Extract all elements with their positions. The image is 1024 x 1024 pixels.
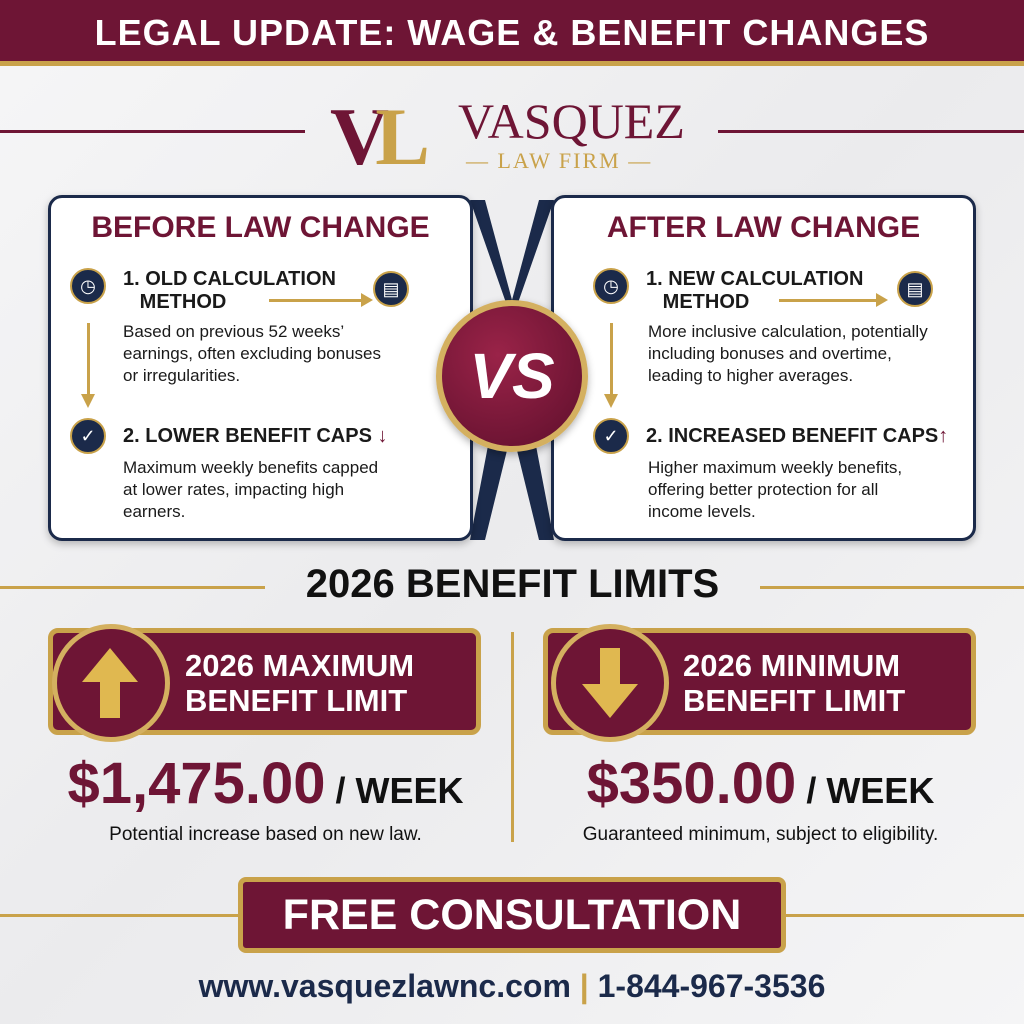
panel: after: offering better protection for all: [648, 480, 878, 499]
panel: after: Higher maximum weekly benefits,: [648, 458, 902, 477]
title after: AFTER LAW CHANGE: [607, 211, 920, 244]
icon clock: ◷: [80, 276, 96, 296]
min value: $350.00 / WEEK: [587, 751, 934, 816]
text: 2026 BENEFIT LIMITS: [306, 562, 719, 606]
title before: BEFORE LAW CHANGE: [91, 211, 430, 244]
header bar: LEGAL UPDATE: WAGE & BENEFIT CHANGES: [95, 12, 929, 53]
panel: after: income levels.: [648, 502, 756, 521]
section heading: [0, 586, 265, 589]
logo: [330, 91, 685, 182]
min box: [543, 624, 976, 845]
panel: after: More inclusive calculation, potentially: [648, 322, 928, 341]
panel: before: 2. LOWER BENEFIT CAPS ↓: [123, 425, 387, 447]
max box: Potential increase based on new law.: [109, 824, 422, 845]
panel: after: 1. NEW CALCULATION: [646, 268, 863, 290]
icon document: [373, 271, 409, 307]
max box: [48, 624, 481, 845]
panel: before: 1. OLD CALCULATION: [123, 268, 336, 290]
panel: before: Based on previous 52 weeks’: [123, 322, 344, 341]
min box: Guaranteed minimum, subject to eligibility.: [583, 824, 938, 845]
up arrow: [82, 648, 138, 718]
panel: after: 2. INCREASED BENEFIT CAPS↑: [646, 425, 948, 447]
panel: before: Maximum weekly benefits capped: [123, 458, 378, 477]
min box: 2026 MINIMUM: [683, 648, 900, 683]
icon document: ▤: [906, 279, 924, 299]
logo: — LAW FIRM —: [466, 148, 652, 173]
logo name: VASQUEZ: [458, 93, 685, 149]
panel: before: earnings, often excluding bonuses: [123, 344, 381, 363]
footer contact: www.vasquezlawnc.com | 1-844-967-3536: [199, 968, 825, 1004]
panel: before: at lower rates, impacting high: [123, 480, 344, 499]
max value: $1,475.00 / WEEK: [67, 751, 464, 816]
CTA button: [0, 914, 1024, 917]
panel: before: [48, 195, 473, 541]
icon clock: [70, 268, 106, 304]
down arrow: [582, 648, 638, 718]
icon shield: [70, 418, 106, 454]
panel: after: METHOD: [663, 291, 749, 313]
icon shield: ✓: [603, 426, 619, 446]
panel: after: [551, 195, 976, 541]
icon shield: [593, 418, 629, 454]
navy connector shapes: [470, 200, 554, 540]
logo mark VL: VL: [330, 91, 416, 182]
max box: 2026 MAXIMUM: [185, 648, 414, 683]
divider: [511, 632, 514, 842]
panel: before: METHOD: [140, 291, 226, 313]
panel: before: earners.: [123, 502, 185, 521]
text: FREE CONSULTATION: [283, 891, 741, 939]
VS badge: VS: [469, 340, 555, 412]
icon clock: ◷: [603, 276, 619, 296]
header bar: [0, 0, 1024, 66]
icon shield: ✓: [80, 426, 96, 446]
max box: BENEFIT LIMIT: [185, 683, 407, 718]
icon document: ▤: [382, 279, 400, 299]
panel: after: including bonuses and overtime,: [648, 344, 892, 363]
icon document: [897, 271, 933, 307]
min box: BENEFIT LIMIT: [683, 683, 905, 718]
icon clock: [593, 268, 629, 304]
VS badge: [436, 300, 588, 452]
panel: after: leading to higher averages.: [648, 366, 853, 385]
panel: before: or irregularities.: [123, 366, 240, 385]
